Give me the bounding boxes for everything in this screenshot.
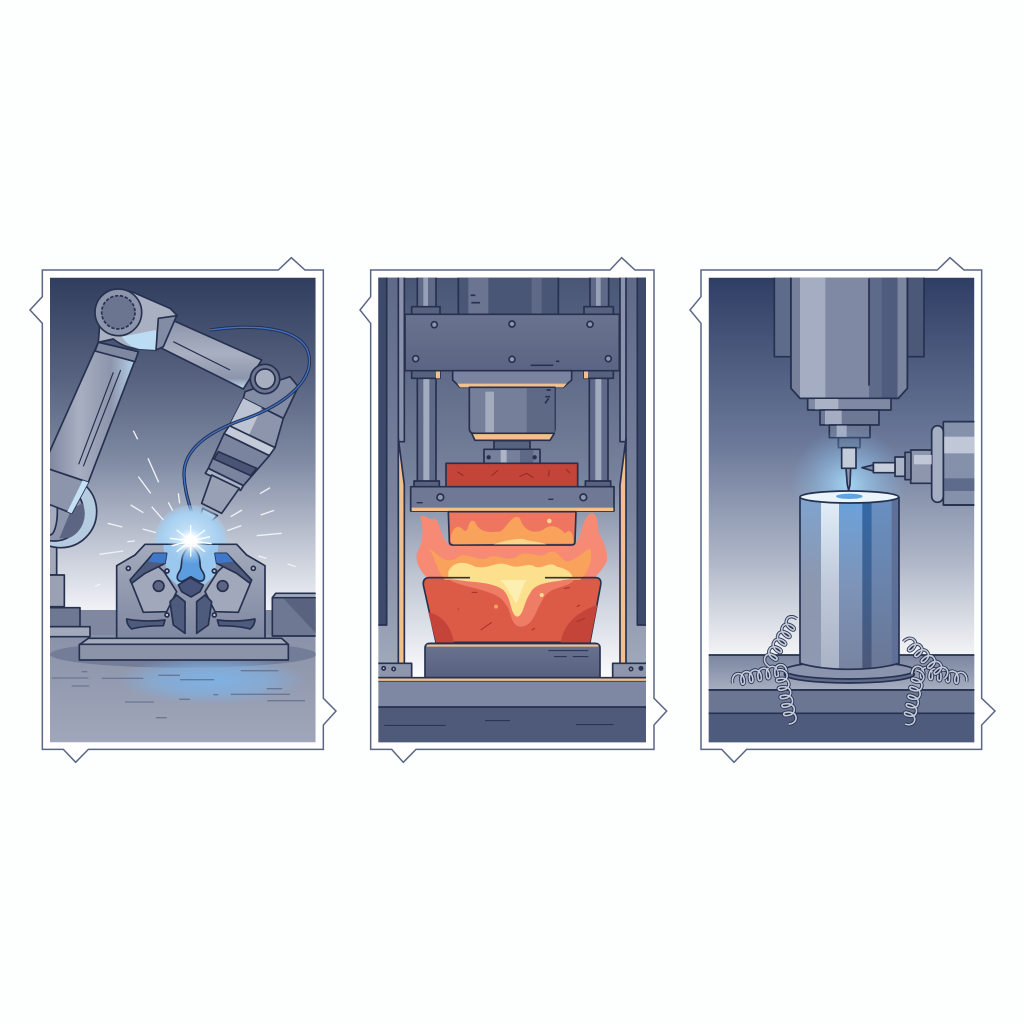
top ram column	[458, 275, 558, 315]
press bed	[377, 678, 648, 744]
machining glow	[790, 427, 907, 543]
metal chips right	[901, 635, 968, 726]
welding head	[200, 364, 298, 521]
guide rods	[412, 275, 613, 487]
outer flames	[416, 513, 607, 583]
metal chips left	[731, 614, 800, 725]
lower crossbar	[411, 487, 614, 511]
weld spark	[168, 525, 213, 562]
robot base joint	[50, 486, 98, 548]
lower red billet	[423, 578, 601, 642]
scene: CNC	[707, 275, 977, 745]
glow dome	[154, 505, 227, 544]
sparks	[95, 431, 296, 586]
workpiece cylinder	[800, 491, 899, 670]
forearm	[158, 318, 262, 389]
panel: CNC machining	[690, 258, 995, 762]
fixture block	[117, 544, 265, 638]
frame: panel 2	[360, 258, 667, 762]
panel: hydraulic forging press	[360, 258, 667, 762]
background	[378, 278, 646, 681]
middle and inner flames	[428, 548, 591, 627]
side feet	[377, 663, 647, 678]
crosshead	[405, 314, 619, 371]
shoulder joint	[95, 289, 142, 336]
background	[709, 278, 974, 658]
elbow housing	[98, 290, 177, 350]
floor dashes	[52, 671, 305, 718]
scene: press	[377, 275, 648, 744]
machine table	[707, 655, 977, 745]
fixture shadow	[50, 646, 316, 668]
upper red billet	[446, 463, 578, 488]
cable	[184, 327, 309, 530]
background wall	[50, 278, 316, 611]
upper flaming block	[448, 512, 576, 545]
fixture base plate	[79, 638, 288, 660]
piston cylinder	[469, 387, 555, 440]
panel: robotic welding	[25, 258, 336, 762]
spindle head	[774, 275, 924, 398]
frame: panel 1	[30, 258, 336, 762]
robot pedestal	[48, 545, 90, 637]
side columns	[377, 275, 648, 665]
workpiece disc base	[784, 662, 914, 683]
frame: panel 3	[690, 258, 995, 762]
blue reflection on floor	[128, 661, 296, 702]
lower arm	[47, 342, 138, 513]
floor	[50, 635, 316, 742]
ram neck and block	[484, 441, 540, 463]
lower anvil	[425, 643, 600, 678]
spindle stages	[808, 398, 891, 448]
side probe	[862, 422, 977, 505]
side box	[272, 593, 317, 636]
piston flange	[453, 371, 572, 387]
cutting tool	[842, 448, 856, 490]
scene: welding	[25, 278, 317, 742]
